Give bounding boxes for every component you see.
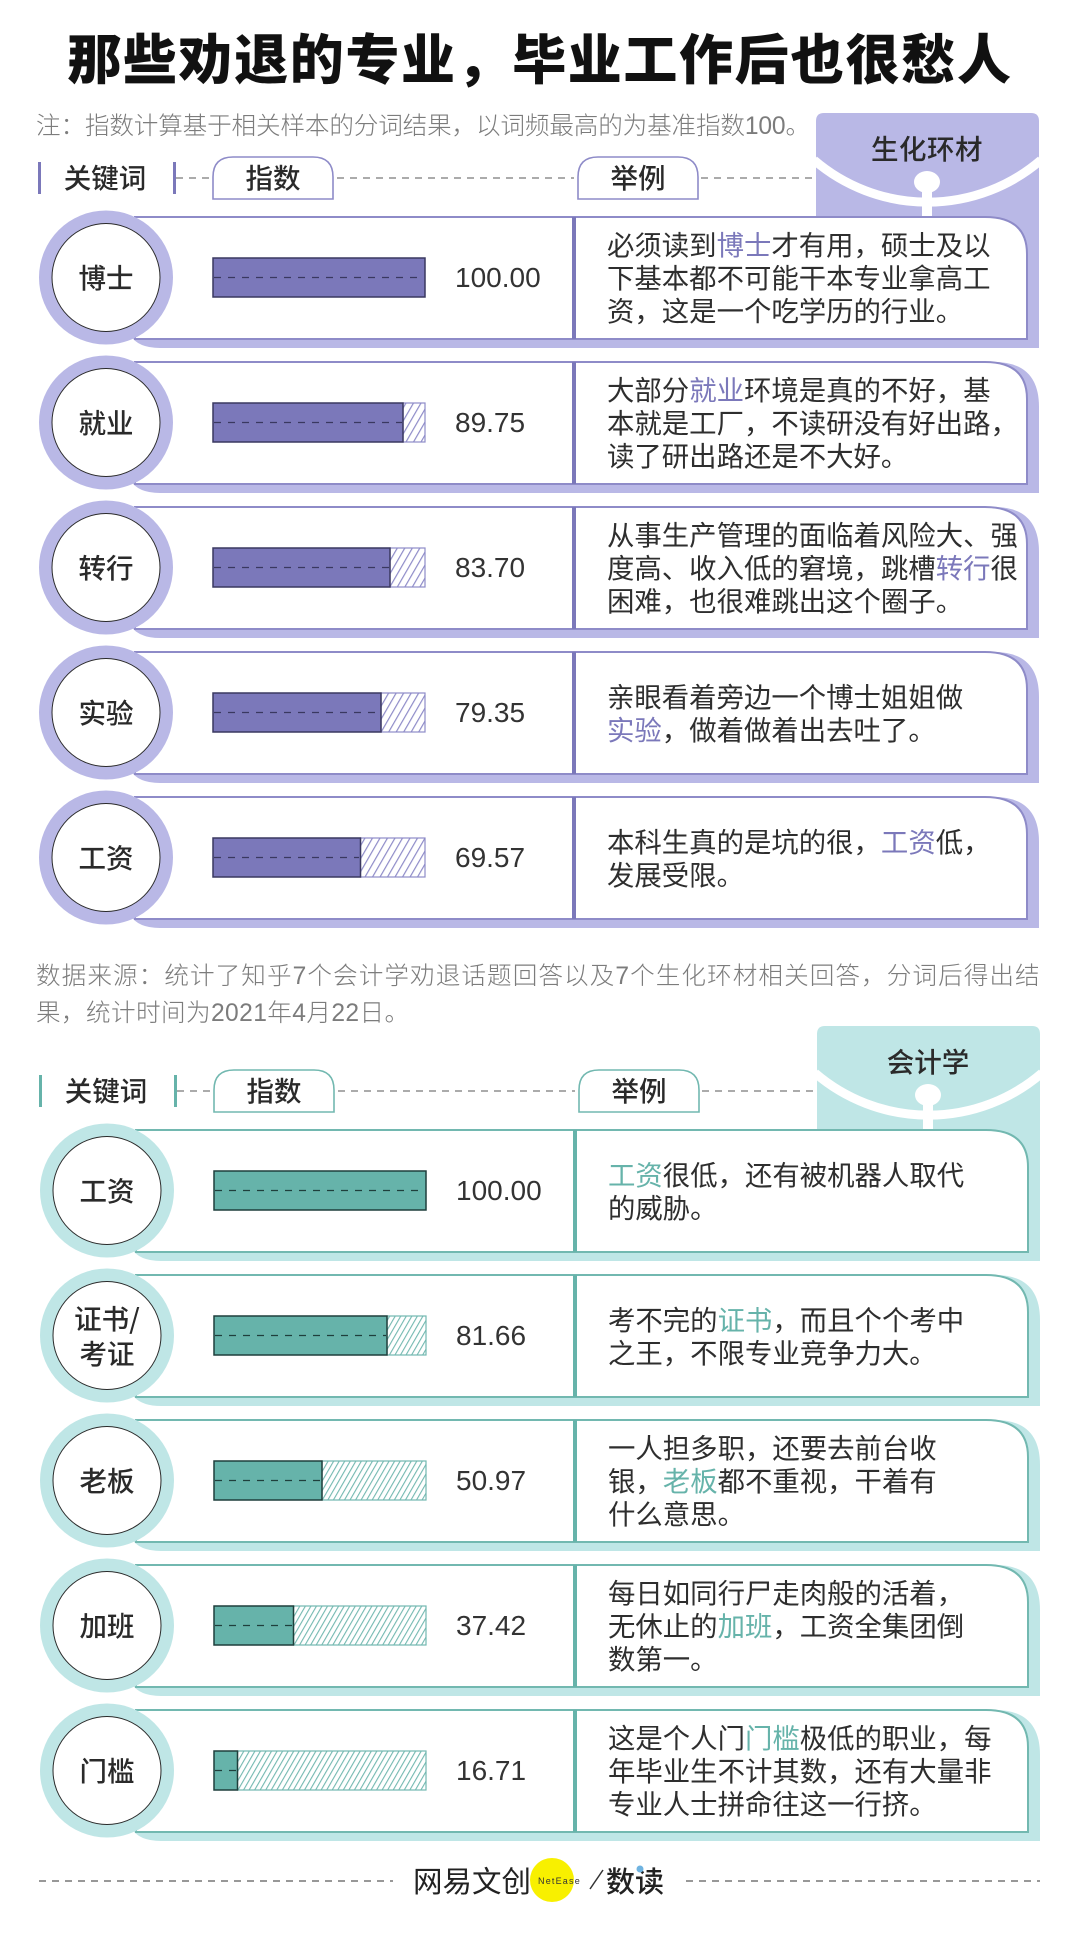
category tag: 生化环材 [814,113,1041,230]
row: 加班: 无休止的加班，工资全集团倒 [608,1604,964,1644]
row: 实验: 实验，做着做着出去吐了。 [607,708,936,748]
row: 老板: 老板 [80,1459,134,1499]
panel: 生化环材 [38,113,1041,928]
row: 门槛: 这是个人门门槛极低的职业，每 [608,1716,992,1756]
row: 转行: 83.70 [455,552,525,583]
footer logo: 数读 [606,1859,664,1901]
table header [39,1069,817,1112]
row: 老板: 50.97 [456,1465,526,1496]
row: 博士 [39,210,1039,348]
table header: 关键词 [64,156,146,196]
row: 工资: 69.57 [455,842,525,873]
category tag: 会计学: 会计学 [887,1040,969,1080]
row: 加班 [40,1558,1040,1696]
row: 门槛: 专业人士拼命往这一行挤。 [608,1782,937,1822]
row: 老板 [40,1414,1040,1551]
row: 实验: 实验 [78,691,134,731]
panel: 会计学 [39,1026,1042,1841]
row: 就业: 本就是工厂，不读研没有好出路， [607,401,1018,441]
row: 博士: 资，这是一个吃学历的行业。 [607,289,963,329]
table header: 指数 [246,1069,302,1109]
row: 博士: 博士 [78,256,134,296]
row: 门槛: 门槛 [80,1749,134,1789]
row: 实验 [39,646,1039,783]
row: 转行: 度高、收入低的窘境，跳槽转行很 [607,546,1018,586]
row: 实验: 79.35 [455,697,525,728]
row: 证书/考证: 证书/ [74,1297,140,1337]
category tag: 生化环材: 生化环材 [871,127,983,167]
data source note: 果，统计时间为2021年4月22日。 [36,999,409,1027]
row: 工资: 的威胁。 [608,1186,718,1226]
table header: 举例 [610,156,666,196]
row: 工资: 100.00 [456,1175,542,1206]
note: index calculation: 注：指数计算基于相关样本的分词结果，以词频最高的为基准指数100。 [36,112,810,140]
row: 工资: 工资 [80,1169,134,1209]
row: 博士: 100.00 [455,262,541,293]
data source note: 数据来源：统计了知乎7个会计学劝退话题回答以及7个生化环材相关回答，分词后得出结 [36,962,1041,990]
row: 证书/考证 [40,1268,1040,1406]
row: 转行 [39,500,1039,638]
table header: 指数 [246,156,300,196]
footer logo [39,1858,1040,1902]
row: 证书/考证: 考不完的证书，而且个个考中 [608,1298,964,1338]
row: 工资: 工资很低，还有被机器人取代 [608,1153,964,1193]
title: 那些劝退的专业，毕业工作后也很愁人 [67,16,1013,95]
row: 门槛 [40,1704,1040,1841]
row: 加班: 加班 [80,1604,134,1644]
table header: 举例 [612,1069,666,1109]
row: 工资: 工资 [78,836,134,876]
row: 门槛: 年毕业生不计其数，还有大量非 [608,1749,991,1789]
row: 转行: 困难，也很难跳出这个圈子。 [607,579,963,619]
row: 就业: 大部分就业环境是真的不好，基 [607,368,991,408]
row: 工资 [40,1124,1040,1261]
row: 证书/考证: 考证 [80,1332,134,1372]
row: 工资: 本科生真的是坑的很，工资低， [607,820,991,860]
row: 工资 [39,790,1039,928]
row: 工资: 发展受限。 [607,853,744,893]
row: 就业: 就业 [78,401,134,441]
row: 老板: 银，老板都不重视，干着有 [608,1459,937,1499]
table header [38,156,816,199]
row: 加班: 37.42 [456,1610,526,1641]
row: 老板: 什么意思。 [608,1492,745,1532]
row: 老板: 一人担多职，还要去前台收 [608,1426,937,1466]
row: 证书/考证: 81.66 [456,1320,526,1351]
row: 博士: 下基本都不可能干本专业拿高工 [607,256,990,296]
row: 加班: 每日如同行尸走肉般的活着， [608,1571,964,1611]
row: 转行: 从事生产管理的面临着风险大、强 [607,513,1018,553]
category tag: 会计学 [815,1026,1042,1143]
table header: 关键词 [65,1069,147,1109]
row: 转行: 转行 [78,546,134,586]
row: 加班: 数第一。 [608,1637,718,1677]
row: 证书/考证: 之王，不限专业竞争力大。 [608,1331,937,1371]
footer logo: NetEase [538,1876,581,1886]
row: 门槛: 16.71 [456,1755,526,1786]
row: 实验: 亲眼看着旁边一个博士姐姐做 [607,675,963,715]
row: 就业 [39,356,1039,493]
footer logo: 网易文创 [413,1859,531,1901]
row: 就业: 读了研出路还是不大好。 [607,434,908,474]
row: 就业: 89.75 [455,407,525,438]
row: 博士: 必须读到博士才有用，硕士及以 [607,223,991,263]
